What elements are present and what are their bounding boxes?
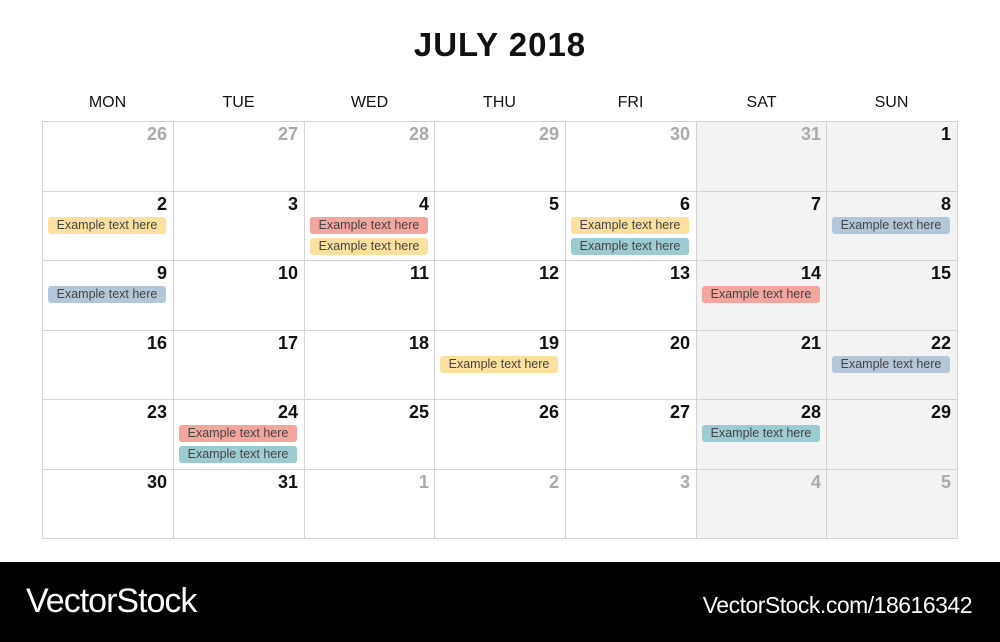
calendar grid: 28 xyxy=(409,124,429,144)
calendar grid: Example text here xyxy=(711,287,811,301)
calendar grid: Example text here xyxy=(580,239,680,253)
calendar grid: 3 xyxy=(680,472,690,492)
calendar grid: 16 xyxy=(147,333,167,353)
footer url: VectorStock.com/18616342 xyxy=(703,592,972,618)
calendar grid: Example text here xyxy=(188,426,288,440)
calendar grid: 29 xyxy=(539,124,559,144)
calendar grid: 9 xyxy=(157,263,167,283)
calendar grid: 1 xyxy=(419,472,429,492)
calendar grid: 8 xyxy=(941,194,951,214)
calendar grid: 27 xyxy=(278,124,298,144)
calendar grid: 31 xyxy=(801,124,821,144)
calendar grid: 17 xyxy=(278,333,298,353)
weekday headers xyxy=(89,94,908,111)
calendar grid: 4 xyxy=(811,472,821,492)
weekday headers: FRI xyxy=(618,94,643,111)
calendar grid: 2 xyxy=(157,194,167,214)
calendar grid: 11 xyxy=(410,263,429,283)
calendar grid: Example text here xyxy=(319,218,419,232)
calendar grid: 3 xyxy=(288,194,298,214)
calendar grid: 13 xyxy=(670,263,690,283)
weekday headers: SAT xyxy=(747,94,776,111)
calendar grid: 29 xyxy=(931,402,951,422)
calendar grid: 19 xyxy=(539,333,559,353)
calendar grid: Example text here xyxy=(580,218,680,232)
weekday headers: TUE xyxy=(222,94,254,111)
weekday headers: SUN xyxy=(875,94,908,111)
calendar grid: 10 xyxy=(278,263,298,283)
calendar grid: 7 xyxy=(811,194,821,214)
calendar grid: 15 xyxy=(931,263,951,283)
calendar grid: 27 xyxy=(670,402,690,422)
calendar grid: Example text here xyxy=(711,426,811,440)
calendar grid: 22 xyxy=(931,333,951,353)
calendar grid: 5 xyxy=(549,194,559,214)
calendar grid: 24 xyxy=(278,402,298,422)
calendar grid: 25 xyxy=(409,402,429,422)
footer logo: VectorStock xyxy=(26,582,196,620)
calendar grid: 4 xyxy=(419,194,429,214)
calendar grid: 26 xyxy=(147,124,167,144)
calendar grid: 14 xyxy=(801,263,821,283)
calendar grid: Example text here xyxy=(319,239,419,253)
weekday headers: MON xyxy=(89,94,126,111)
calendar grid: 26 xyxy=(539,402,559,422)
footer bar xyxy=(0,562,1000,642)
calendar grid: 6 xyxy=(680,194,690,214)
calendar grid: 18 xyxy=(409,333,429,353)
calendar grid: 2 xyxy=(549,472,559,492)
title: JULY 2018 xyxy=(414,26,586,63)
calendar grid: Example text here xyxy=(57,287,157,301)
calendar grid: Example text here xyxy=(841,218,941,232)
calendar grid: 30 xyxy=(147,472,167,492)
calendar grid: 23 xyxy=(147,402,167,422)
calendar grid: 20 xyxy=(670,333,690,353)
calendar grid: 5 xyxy=(941,472,951,492)
calendar grid: 30 xyxy=(670,124,690,144)
calendar grid: Example text here xyxy=(841,357,941,371)
calendar grid: 12 xyxy=(539,263,559,283)
calendar grid: 31 xyxy=(278,472,298,492)
weekday headers: THU xyxy=(483,94,516,111)
calendar grid: Example text here xyxy=(57,218,157,232)
calendar grid: Example text here xyxy=(449,357,549,371)
calendar grid: 28 xyxy=(801,402,821,422)
weekday headers: WED xyxy=(351,94,388,111)
calendar grid: Example text here xyxy=(188,447,288,461)
calendar grid: 1 xyxy=(941,124,951,144)
calendar grid xyxy=(42,121,958,539)
calendar grid: 21 xyxy=(801,333,821,353)
